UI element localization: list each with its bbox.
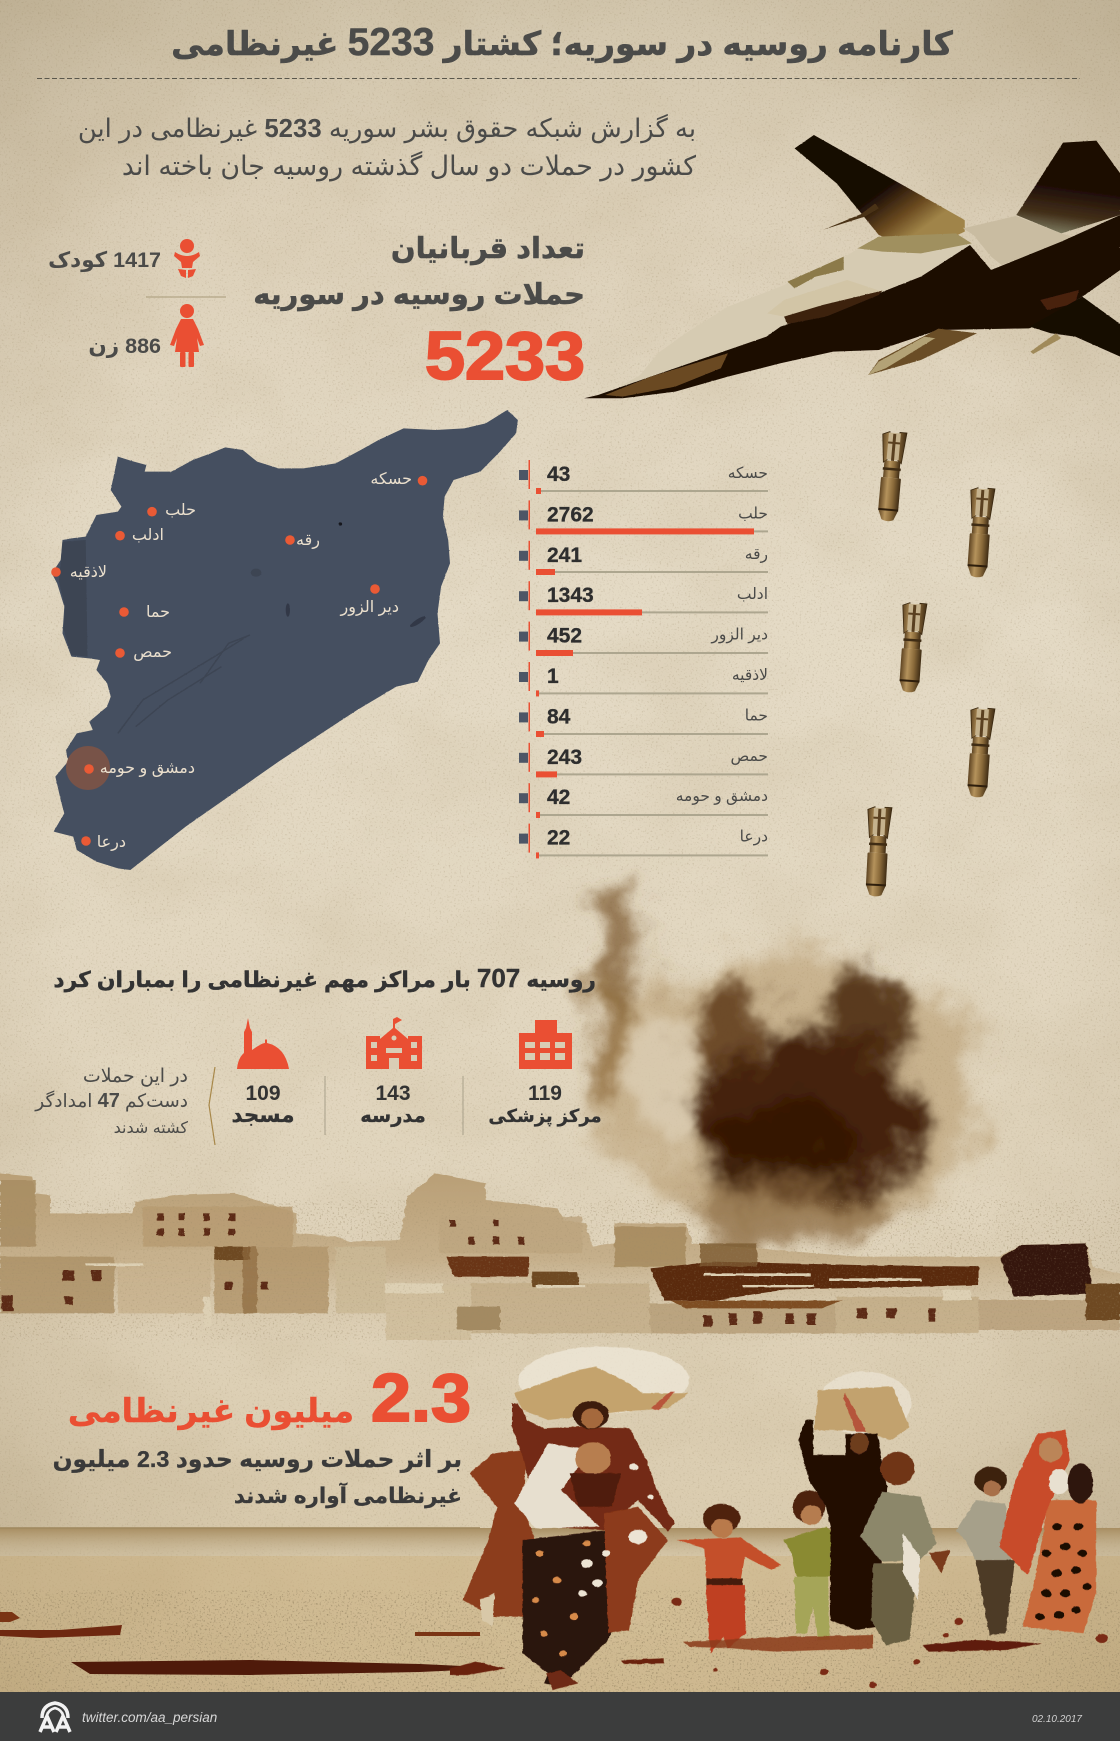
boy near woman — [974, 1467, 1007, 1493]
light smoke puff — [633, 1020, 697, 1160]
windows — [1, 1213, 936, 1327]
map silhouette — [52, 410, 518, 870]
ground shadows — [0, 1625, 122, 1638]
values: 1 — [547, 665, 559, 688]
headline words: میلیون غیرنظامی — [68, 1392, 354, 1431]
date: 02.10.2017 — [1032, 1714, 1082, 1725]
region names: حما — [745, 707, 768, 724]
intro text: کشور در حملات دو سال گذشته روسیه جان باخته اند — [122, 150, 696, 182]
logo: AA — [40, 1703, 70, 1732]
label: مرکز پزشکی — [488, 1106, 602, 1127]
ground debris — [671, 1598, 1108, 1688]
city names: ادلب — [132, 527, 164, 544]
values: 243 — [547, 746, 582, 769]
city names: درعا — [97, 834, 126, 852]
city names — [70, 471, 412, 852]
title: کارنامه روسیه در سوریه؛ کشتار 5233 غیرنظامی — [171, 21, 954, 64]
boy in grey — [880, 1452, 915, 1485]
city names: رقه — [296, 532, 320, 550]
values: 22 — [547, 827, 570, 850]
big number: 2.3 — [371, 1360, 471, 1436]
values: 1343 — [547, 584, 594, 607]
desert ground — [0, 1527, 1120, 1692]
ruined city — [0, 1173, 1120, 1347]
label: مدرسه — [360, 1105, 426, 1127]
schools stat — [360, 1017, 426, 1127]
bar tracks — [536, 490, 768, 856]
region names — [676, 465, 768, 846]
city names: حما — [146, 604, 170, 621]
victims heading — [253, 233, 585, 311]
city names: دمشق و حومه — [100, 760, 195, 778]
aid workers note: دست‌کم 47 امدادگر — [34, 1090, 188, 1112]
footer bar — [0, 1692, 1120, 1741]
city names: حمص — [133, 644, 172, 662]
values: 452 — [547, 625, 582, 648]
values: 2762 — [547, 503, 594, 526]
plane photo — [584, 135, 1120, 398]
region names: دیر الزور — [710, 627, 768, 645]
label: مسجد — [231, 1103, 295, 1127]
victims heading: تعداد قربانیان — [391, 233, 585, 265]
region names: حسکه — [728, 465, 768, 482]
mosques stat — [231, 1018, 295, 1127]
icon: mosque — [237, 1018, 289, 1069]
values: 241 — [547, 544, 582, 567]
wing missile — [823, 203, 879, 230]
pale streaks — [86, 1263, 971, 1327]
region names: ادلب — [737, 586, 768, 603]
displaced people — [450, 1347, 1108, 1690]
infant wrap — [514, 1443, 600, 1528]
region names: رقه — [745, 546, 768, 563]
icon: school — [366, 1017, 422, 1069]
displacement text: بر اثر حملات روسیه حدود 2.3 میلیون — [53, 1446, 462, 1473]
woman in red scarf — [1023, 1500, 1096, 1633]
medical centres stat — [488, 1020, 602, 1127]
region names: حلب — [738, 505, 768, 522]
head bundle — [514, 1367, 688, 1420]
main woman — [512, 1403, 674, 1532]
lower missile pod — [868, 329, 977, 375]
pale forward fuselage — [605, 237, 988, 395]
bundle halo — [518, 1347, 689, 1413]
displaced civilians headline — [68, 1360, 471, 1436]
values: 43 — [547, 463, 570, 486]
section heading: strikes on civilian centres: روسیه 707 بار مراکز مهم غیرنظامی را بمباران کرد — [53, 963, 596, 993]
upper missile — [767, 280, 882, 317]
map of Syria — [51, 410, 518, 870]
skyline mass — [0, 1173, 1120, 1347]
icon: hospital — [519, 1020, 572, 1069]
region names: حمص — [730, 748, 768, 765]
woman count: 886 زن — [88, 334, 161, 358]
tail fin — [1016, 141, 1120, 233]
victims total: 5233 — [425, 318, 585, 394]
value: 119 — [528, 1082, 562, 1105]
child count: 1417 کودک — [48, 248, 161, 272]
city names: دیر الزور — [340, 599, 399, 617]
lower wing — [1030, 297, 1120, 357]
bars — [536, 488, 754, 858]
rear store — [1030, 333, 1061, 354]
pale rear fuselage — [963, 216, 1079, 265]
woman in black with bundle — [814, 1387, 909, 1440]
bar chart — [519, 460, 768, 858]
intro text — [78, 113, 696, 182]
city names: لاذقیه — [70, 564, 107, 581]
displacement text: غیرنظامی آواره شدند — [234, 1482, 462, 1508]
displacement text — [53, 1446, 462, 1508]
upper wing — [795, 135, 965, 252]
stat icon: woman — [170, 304, 204, 367]
woman at back left — [463, 1450, 535, 1617]
city grain — [0, 1200, 1120, 1340]
twitter handle: twitter.com/aa_persian — [82, 1710, 217, 1725]
aid workers note: کشته شدند — [114, 1120, 188, 1137]
values — [547, 463, 594, 850]
city names: حلب — [165, 502, 196, 519]
values: 84 — [547, 705, 571, 728]
region names: لاذقیه — [732, 667, 768, 684]
stat icon: child — [174, 239, 200, 278]
city names: حسکه — [370, 471, 412, 488]
Damascus highlight — [66, 746, 110, 790]
values: 42 — [547, 786, 570, 809]
child in red — [703, 1504, 740, 1533]
foot shadows — [683, 1635, 873, 1652]
falling bombs — [863, 431, 995, 897]
row axis ticks — [519, 470, 528, 844]
region names: درعا — [740, 829, 768, 846]
city markers — [51, 476, 427, 846]
value: 143 — [375, 1082, 411, 1105]
intro text: به گزارش شبکه حقوق بشر سوریه 5233 غیرنظامی در این — [78, 113, 696, 144]
dark underside — [584, 215, 1120, 398]
region names: دمشق و حومه — [676, 788, 768, 806]
green child — [793, 1490, 825, 1523]
aid workers note: در این حملات — [83, 1066, 188, 1087]
value: 109 — [245, 1082, 281, 1105]
dark damaged blocks — [446, 1257, 529, 1277]
building blocks — [0, 1180, 1120, 1340]
aid workers note — [34, 1066, 188, 1137]
victims heading: حملات روسیه در سوریه — [253, 279, 585, 311]
smoke plume — [588, 875, 985, 1255]
